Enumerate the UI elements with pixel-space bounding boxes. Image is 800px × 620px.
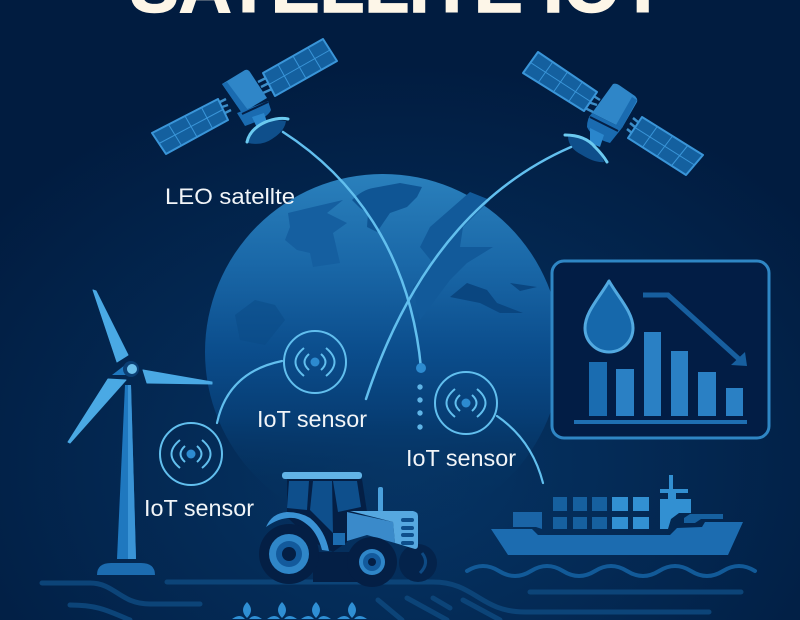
icon: left LEO satellite: [152, 39, 337, 154]
label: IoT sensor right: IoT sensor: [406, 445, 516, 471]
solar panel: [628, 117, 703, 175]
trend arrow: [643, 295, 740, 360]
bar chart: [574, 332, 747, 424]
panel: water data chart: [552, 261, 769, 438]
icon: container ship: [491, 475, 743, 555]
label: LEO satellite: LEO satellte: [165, 184, 295, 209]
sensor: middle: [284, 331, 346, 393]
waves: [467, 566, 755, 576]
label: IoT sensor middle: IoT sensor: [257, 406, 367, 432]
icon: crop plants: [232, 602, 367, 619]
signal link: right satellite: [366, 147, 571, 399]
icon: wind turbine: [68, 290, 212, 575]
icon: water drop: [585, 281, 633, 352]
sensor link: right to ship: [497, 416, 543, 483]
globe: [205, 174, 561, 530]
relay dots: [416, 363, 426, 430]
icon: right satellite: [523, 52, 703, 175]
icon: tractor: [259, 472, 437, 587]
sensor: left: [160, 423, 222, 485]
ground lines: [42, 582, 741, 620]
label: IoT sensor left: IoT sensor: [144, 495, 254, 521]
solar panel: [152, 99, 228, 154]
sensor link: left to middle: [217, 361, 282, 423]
sensor: right: [435, 372, 497, 434]
solar panel: [263, 39, 337, 96]
solar panel: [523, 52, 597, 111]
signal link: left satellite: [283, 132, 421, 368]
